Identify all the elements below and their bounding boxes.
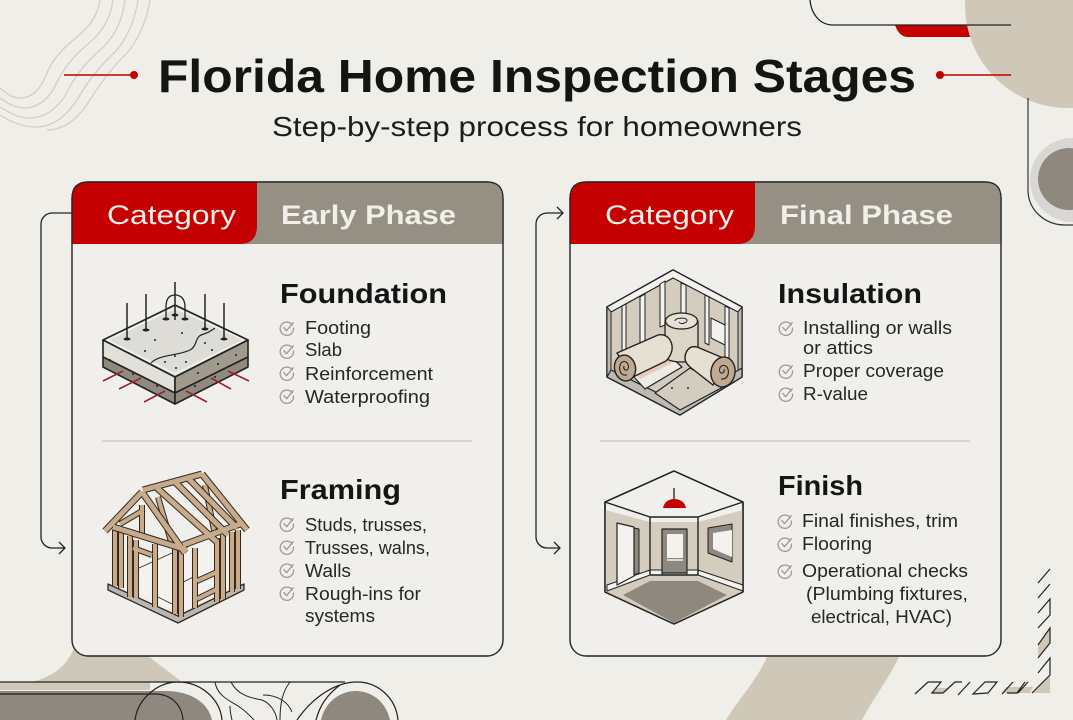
text: foundation: Waterproofing (305, 387, 430, 407)
icon: finished room (605, 471, 743, 624)
header: early phase: Category (107, 200, 237, 230)
text: insulation: Proper coverage (803, 361, 944, 381)
decoration: bottom right crescent (726, 657, 899, 720)
text: finish: Final finishes, trim (802, 511, 958, 531)
text: framing: Trusses, walns, (305, 538, 430, 558)
decoration: top right shapes (810, 0, 1073, 108)
text: foundation: Footing (305, 318, 371, 338)
text: framing: Rough-ins for (305, 584, 421, 604)
text: foundation: Foundation (280, 278, 447, 309)
icon: insulation rolls (607, 270, 742, 415)
text: finish (778, 470, 968, 627)
panel: final phase (570, 182, 1001, 656)
text: finish: Finish (778, 470, 863, 501)
text: insulation: or attics (803, 338, 873, 358)
decoration: contour lines top left (0, 0, 150, 130)
text: framing (280, 474, 430, 626)
decoration: right side ring (1028, 98, 1073, 225)
text: insulation (778, 278, 952, 404)
text: finish: Operational checks (802, 561, 968, 581)
text: finish: electrical, HVAC) (811, 607, 952, 627)
arrow: left connector (41, 213, 72, 554)
header: final phase: Category (605, 200, 735, 230)
decoration: hatched corner (915, 569, 1050, 695)
header: early phase (72, 182, 503, 244)
text: insulation: Insulation (778, 278, 922, 309)
text: foundation: Slab (305, 340, 342, 360)
text: insulation: Installing or walls (803, 318, 952, 338)
title ornament right (936, 71, 1011, 79)
text: framing: systems (305, 606, 375, 626)
header: final phase (570, 182, 1001, 244)
subtitle: Step-by-step process for homeowners (272, 111, 802, 142)
text: finish: (Plumbing fixtures, (806, 584, 968, 604)
title ornament left (64, 71, 138, 79)
text: finish: Flooring (802, 534, 872, 554)
text: framing: Studs, trusses, (305, 515, 427, 535)
text: foundation: Reinforcement (305, 364, 433, 384)
text: foundation (280, 278, 447, 407)
decoration: bottom left shapes (0, 648, 398, 720)
text: framing: Walls (305, 561, 351, 581)
text: insulation: R-value (803, 384, 868, 404)
arrow: right connector (536, 207, 563, 554)
panel: early phase (72, 182, 503, 656)
title: Florida Home Inspection Stages (158, 50, 916, 102)
header: final phase: Final Phase (780, 200, 953, 230)
icon: house framing (105, 474, 247, 623)
icon: foundation slab (103, 282, 249, 404)
header: early phase: Early Phase (281, 200, 456, 230)
text: framing: Framing (280, 474, 401, 505)
